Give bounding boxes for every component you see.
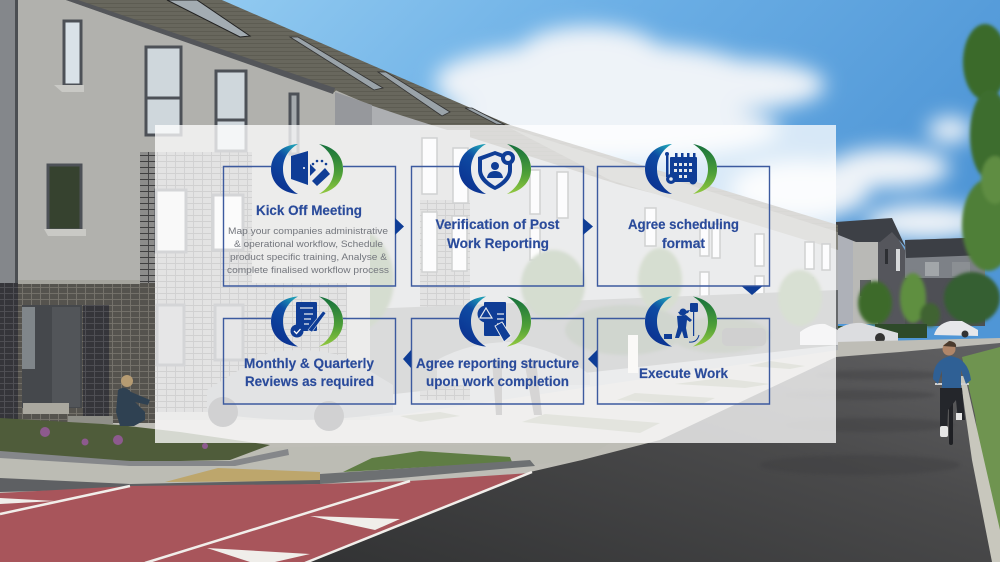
- step 3: scheduling: [598, 144, 770, 286]
- planting bed: [0, 418, 289, 466]
- step 3 heading: Agree scheduling: [628, 217, 739, 232]
- road shadows: [760, 370, 960, 475]
- step 6 ring: [271, 296, 343, 346]
- step 5 ring: [459, 296, 531, 346]
- grass island: [343, 451, 512, 472]
- arrow: step 4 to 5: [588, 350, 597, 368]
- terrace row: [222, 0, 838, 420]
- step 3 box: [598, 166, 770, 286]
- step 2 heading: Verification of Post: [436, 217, 560, 232]
- kerb: [320, 460, 535, 484]
- step 1 description: product specific training, Analyse &: [230, 252, 388, 263]
- icon: report with warning: [478, 302, 511, 342]
- step 2: verification: [412, 144, 584, 286]
- icon: checklist and pen: [290, 302, 326, 338]
- silver car: [207, 350, 393, 431]
- clouds: [420, 26, 985, 240]
- arrow: step 2 to 3: [583, 218, 593, 235]
- step 2 heading: Work Reporting: [447, 236, 549, 251]
- step 1 description: & operational workflow, Schedule: [234, 239, 383, 250]
- grass verge right: [962, 347, 1000, 562]
- arrow: step 3 to 4: [742, 286, 762, 295]
- step 5: reporting structure: [412, 296, 584, 404]
- planters: [400, 361, 805, 433]
- trees: [858, 24, 1000, 327]
- step 1 description: [227, 226, 389, 276]
- sky: [0, 0, 1000, 360]
- step 5 heading: upon work completion: [426, 374, 569, 389]
- kerb right: [960, 376, 1000, 562]
- step 3 heading: format: [662, 236, 706, 251]
- step 5 heading: [416, 356, 579, 389]
- step 6 box: [224, 318, 396, 404]
- step 3 heading: [628, 217, 739, 251]
- step 6 heading: Monthly & Quarterly: [244, 356, 374, 371]
- icon: calendar and tools: [665, 152, 697, 184]
- step 6 heading: [244, 356, 374, 389]
- arrow: step 1 to 2: [395, 218, 404, 235]
- step 1 box: [224, 166, 396, 286]
- step 4 box: [598, 318, 770, 404]
- step 6: reviews: [224, 296, 396, 404]
- step 4 heading: Execute Work: [639, 366, 728, 381]
- ground: [0, 338, 1000, 562]
- step 4: execute work: [598, 296, 770, 404]
- step 3 ring: [645, 144, 717, 194]
- left house facade: [0, 0, 372, 424]
- step 5 heading: Agree reporting structure: [416, 356, 579, 371]
- hedges and cars right: [836, 321, 978, 343]
- cars and people in street: [437, 324, 838, 415]
- icon: door and handshake: [291, 151, 330, 186]
- red road: [0, 473, 530, 562]
- roof: [66, 0, 340, 93]
- icon: shield and gear: [478, 151, 515, 190]
- windows: [48, 21, 298, 365]
- step 5 box: [412, 318, 584, 404]
- woman seated: [116, 375, 150, 426]
- step 6 heading: Reviews as required: [245, 374, 374, 389]
- road asphalt: [305, 343, 1000, 562]
- step 1 description: complete finalised workflow process: [227, 265, 389, 276]
- translucent panel: [155, 125, 836, 443]
- step 1 heading: Kick Off Meeting: [256, 203, 362, 218]
- distant houses right: [836, 218, 985, 326]
- cyclist: [933, 341, 971, 445]
- tactile strip: [165, 468, 320, 482]
- step 2 box: [412, 166, 584, 286]
- step 2 heading: [436, 217, 560, 251]
- step 1 ring: [271, 144, 343, 194]
- arrow: step 5 to 6: [403, 350, 411, 368]
- step 2 ring: [459, 144, 531, 194]
- pavement: [0, 443, 610, 490]
- step 1 description: Map your companies administrative: [228, 226, 388, 237]
- step 4 ring: [645, 296, 717, 346]
- ground-floor brick: [0, 283, 155, 423]
- icon: worker with equipment: [664, 303, 699, 342]
- step 1: kick off meeting: [224, 144, 396, 286]
